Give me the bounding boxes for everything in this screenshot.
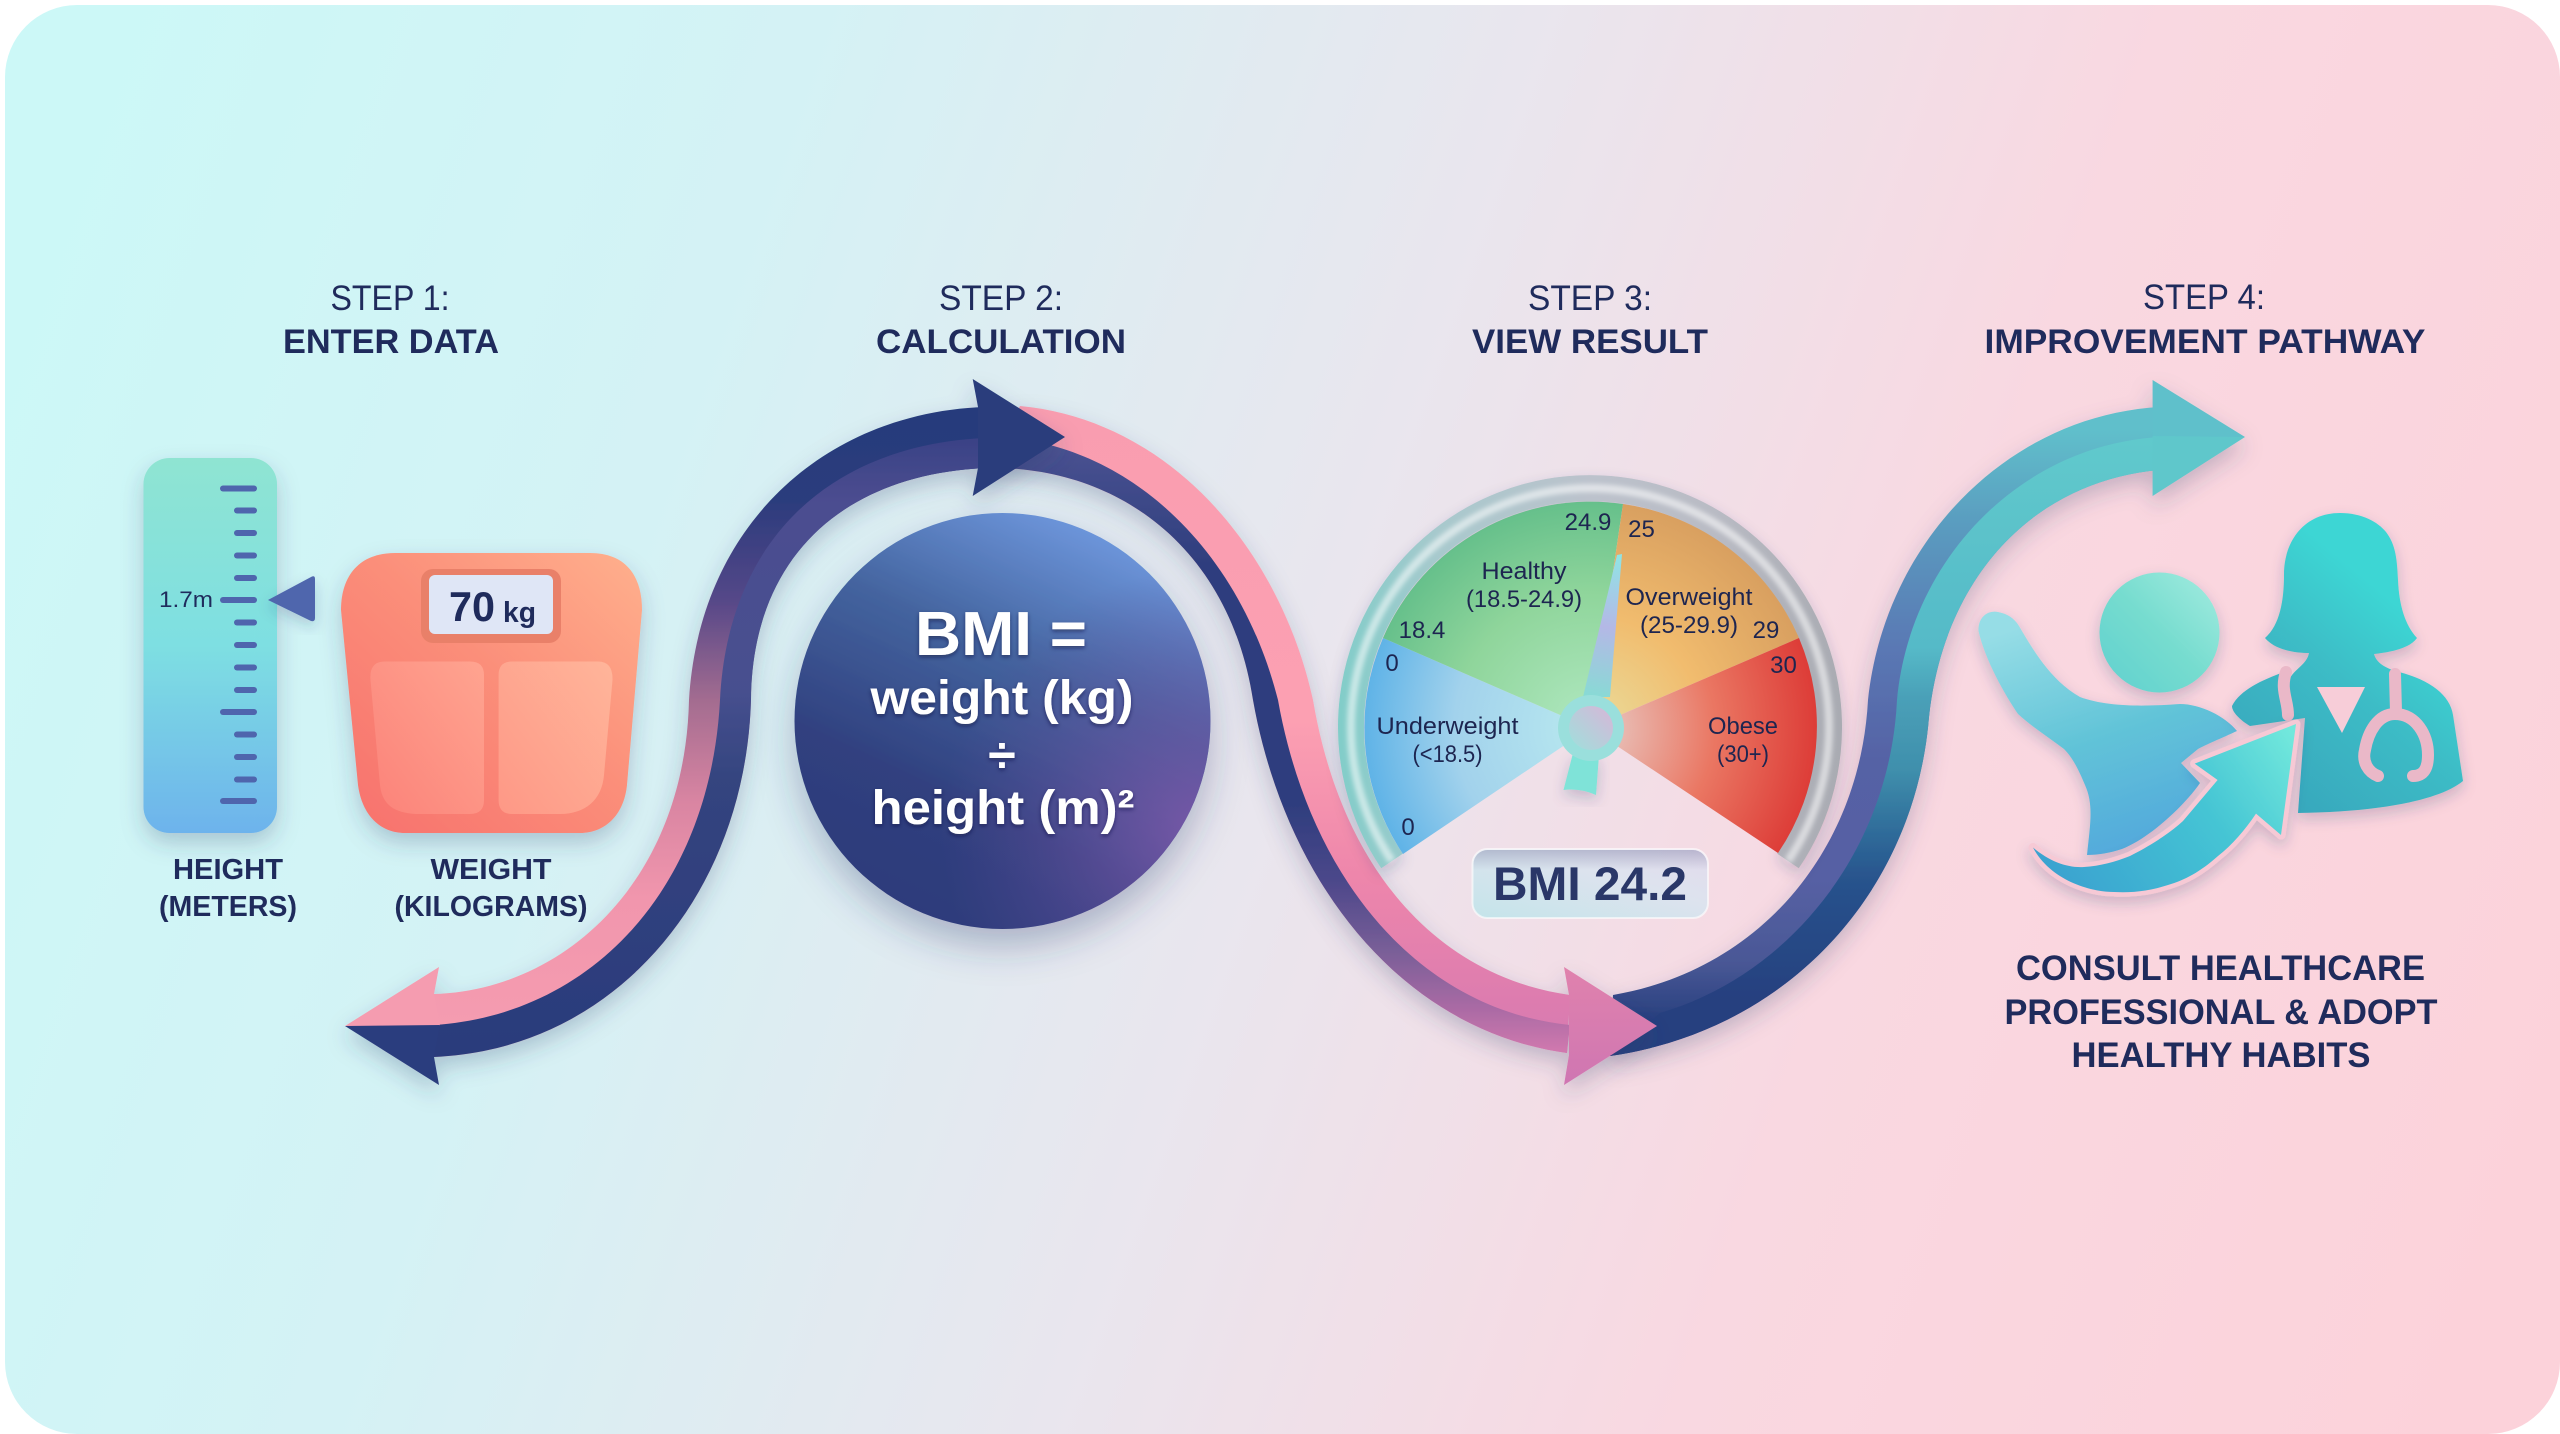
text: improvement advice: CONSULT HEALTHCARE xyxy=(2016,949,2425,988)
icon: height ruler: 1.7m xyxy=(159,587,213,612)
text: improvement advice xyxy=(2004,949,2438,1075)
gauge segment: underweight xyxy=(1364,638,1590,854)
icon: doctor xyxy=(2232,513,2463,813)
icon: weight scale: kg xyxy=(503,597,536,629)
step 4 heading xyxy=(1984,278,2426,361)
icon: weight scale xyxy=(341,553,642,833)
gauge segment: healthy: Healthy xyxy=(1482,558,1566,585)
label: weight: (KILOGRAMS) xyxy=(394,891,588,923)
arrow: ribbon down to result xyxy=(985,406,1657,1085)
gauge rim xyxy=(1351,488,1829,861)
gauge segment: overweight xyxy=(1590,504,1799,728)
step 2 heading: STEP 2: xyxy=(939,279,1063,318)
text: improvement advice: PROFESSIONAL & ADOPT xyxy=(2004,993,2438,1032)
gauge segment: underweight: Underweight xyxy=(1376,713,1519,740)
panel: BMI formula circle: height (m)² xyxy=(872,782,1134,835)
gauge segment: obese: Obese xyxy=(1708,713,1778,740)
BMI value box: BMI 24.2 xyxy=(1493,857,1687,910)
icon: growth arrow xyxy=(2033,724,2296,892)
gauge segment: obese xyxy=(1590,638,1817,853)
gauge segment: overweight: 29 xyxy=(1753,617,1779,644)
label: weight: WEIGHT xyxy=(430,854,552,886)
chart: BMI gauge xyxy=(1351,488,1829,861)
icon: weight scale: 70 xyxy=(449,583,495,630)
icon: height ruler xyxy=(144,458,277,833)
panel: BMI formula circle xyxy=(794,513,1210,929)
label: height: HEIGHT xyxy=(173,854,283,886)
step 3 heading: VIEW RESULT xyxy=(1472,323,1708,361)
icon: height pointer xyxy=(268,576,315,621)
gauge segment: healthy xyxy=(1383,502,1623,728)
step 2 heading xyxy=(876,279,1126,361)
panel: BMI formula circle: weight (kg) xyxy=(869,672,1134,725)
gauge segment: obese: 30 xyxy=(1770,652,1797,679)
gauge segment: overweight: (25-29.9) xyxy=(1640,612,1738,639)
label: height: (METERS) xyxy=(159,891,297,923)
panel: BMI formula circle: BMI = xyxy=(915,600,1087,669)
BMI value box xyxy=(1472,849,1708,918)
step 4 heading: STEP 4: xyxy=(2143,278,2265,317)
gauge segment: healthy: 18.4 xyxy=(1399,617,1445,644)
step 3 heading xyxy=(1472,279,1708,361)
gauge segment: overweight: 25 xyxy=(1628,516,1655,543)
arrow: ribbon teal pathway xyxy=(1610,380,2245,1056)
panel: BMI formula circle: ÷ xyxy=(988,727,1016,783)
step 1 heading xyxy=(283,279,499,361)
gauge segment: healthy: (18.5-24.9) xyxy=(1466,586,1582,613)
step 2 heading: CALCULATION xyxy=(876,323,1126,361)
arrow: ribbon up to calculation xyxy=(345,379,1065,1085)
gauge segment: underweight: 0 xyxy=(1401,814,1415,841)
step 1 heading: ENTER DATA xyxy=(283,323,499,361)
icon: patient body xyxy=(1978,612,2237,855)
gauge needle xyxy=(1558,554,1624,795)
icon: patient head xyxy=(2100,572,2220,692)
gauge segment: obese: (30+) xyxy=(1717,741,1769,768)
step 3 heading: STEP 3: xyxy=(1528,279,1652,318)
label: weight xyxy=(394,854,588,923)
label: height xyxy=(159,854,297,923)
gauge segment: overweight: Overweight xyxy=(1626,584,1753,611)
step 1 heading: STEP 1: xyxy=(330,279,450,318)
text: improvement advice: HEALTHY HABITS xyxy=(2072,1036,2370,1075)
gauge segment: healthy: 24.9 xyxy=(1565,509,1611,536)
gauge segment: underweight: (<18.5) xyxy=(1412,741,1482,768)
icon: patient and doctor xyxy=(1978,513,2463,892)
step 4 heading: IMPROVEMENT PATHWAY xyxy=(1984,323,2426,361)
gauge segment: underweight: 0 xyxy=(1385,650,1399,677)
